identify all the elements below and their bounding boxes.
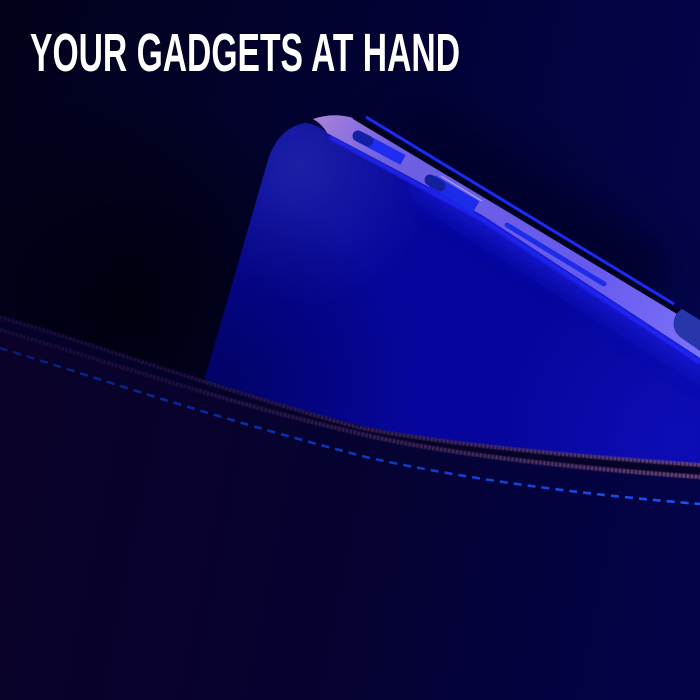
phone rim highlight [330, 137, 700, 362]
title: YOUR GADGETS AT HAND [30, 23, 460, 83]
pocket body [0, 317, 700, 700]
phone edge glow [420, 180, 700, 372]
blue stitch row [0, 348, 700, 504]
side button [674, 309, 700, 351]
top blue screen edge [366, 117, 674, 304]
port one [358, 136, 403, 160]
leather pocket [0, 317, 700, 700]
seam shadow [0, 326, 700, 471]
phone [205, 113, 700, 465]
upper rope stitch [0, 317, 700, 465]
port two [430, 176, 482, 207]
port three slot [507, 225, 604, 284]
phone back panel [205, 123, 700, 465]
phone side band [313, 115, 700, 358]
top dark gap [352, 113, 700, 328]
lower rope stitch [0, 330, 700, 477]
